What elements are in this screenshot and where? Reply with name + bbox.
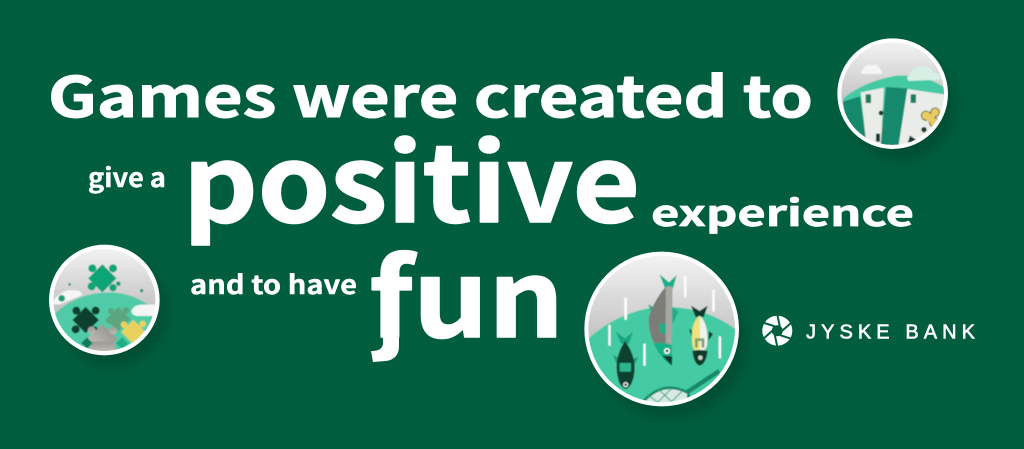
icon: aperture mark [762, 313, 793, 348]
puzzle piece: green top [88, 264, 117, 292]
heading: positive: positive [183, 99, 640, 253]
dark fish [613, 332, 638, 389]
text: JYSKE BANK: JYSKE BANK [806, 322, 976, 344]
big grey fish [648, 274, 678, 366]
puzzle piece: yellow [121, 320, 147, 344]
text: and to have: and to have [190, 265, 357, 302]
icon: fish circle [584, 252, 747, 418]
puzzle piece: sage [106, 307, 131, 331]
text: give a: give a [88, 158, 166, 195]
heading: fun: fun [369, 214, 564, 368]
icon: puzzle pieces circle [48, 245, 168, 367]
text: experience: experience [651, 185, 914, 237]
puzzle piece: dark [72, 307, 100, 334]
raindrops [608, 276, 721, 366]
icon: playing cards circle [837, 38, 956, 160]
puzzle piece: grey [87, 324, 117, 354]
yellow fish [689, 306, 713, 366]
logo: Jyske Bank [762, 313, 976, 348]
heading: Games were created to: Games were created to [48, 53, 813, 134]
fishing net [642, 368, 720, 402]
